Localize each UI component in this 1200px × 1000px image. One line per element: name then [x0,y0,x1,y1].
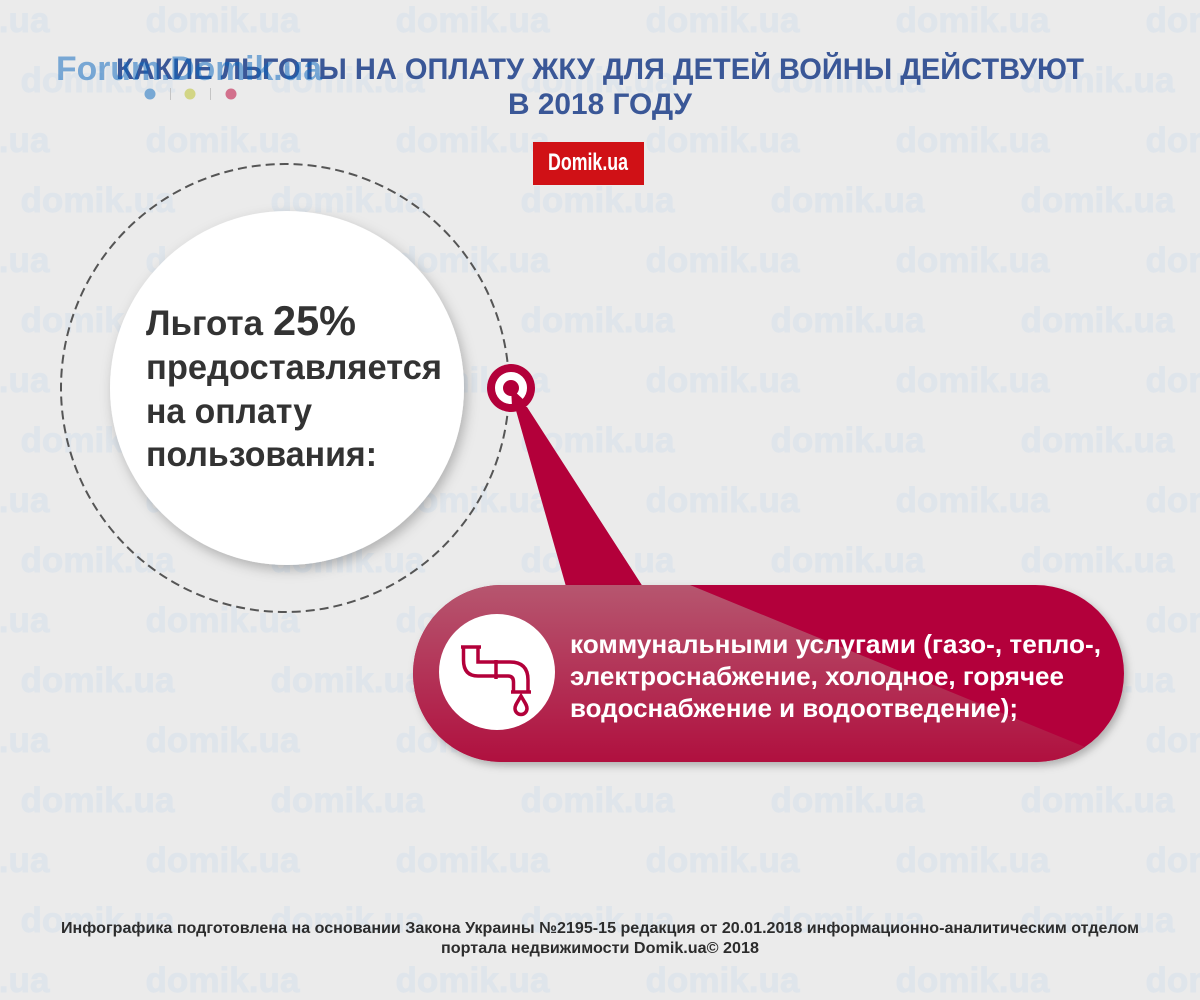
footer note: Инфографика подготовлена на основании Закона Украины №2195-15 редакция от 20.01.2018 информационно-аналитическим отделом [61,920,1139,937]
panel: white circle with benefit text: Льгота [146,304,264,343]
panel: white circle with benefit text: на оплату [146,392,313,431]
footer note: портала недвижимости Domik.ua© 2018 [441,940,759,957]
dashed orbit circle [61,164,509,612]
title: КАКИЕ ЛЬГОТЫ НА ОПЛАТУ ЖКУ ДЛЯ ДЕТЕЙ ВОЙНЫ ДЕЙСТВУЮТ [116,52,1084,86]
callout text [570,629,1101,723]
callout text: электроснабжение, холодное, горячее [570,661,1064,691]
callout text: коммунальными услугами (газо-, тепло-, [570,629,1101,659]
icon: leaking pipe [439,614,555,730]
panel: white circle with benefit text: предоставляется [146,348,442,387]
badge: Domik.ua: Domik.ua [548,149,628,176]
forum logo: Forum.Domik.ua [56,50,323,88]
title [116,52,1084,121]
callout pointer [487,364,645,590]
badge: Domik.ua [533,142,644,185]
panel: white circle with benefit text: 25% [273,297,356,344]
panel: callout pill [413,585,1124,762]
panel: white circle with benefit text [110,211,464,565]
callout text: водоснабжение и водоотведение); [570,693,1018,723]
title: В 2018 ГОДУ [508,88,692,121]
panel: white circle with benefit text: пользования: [146,435,377,474]
footer note [61,920,1139,957]
